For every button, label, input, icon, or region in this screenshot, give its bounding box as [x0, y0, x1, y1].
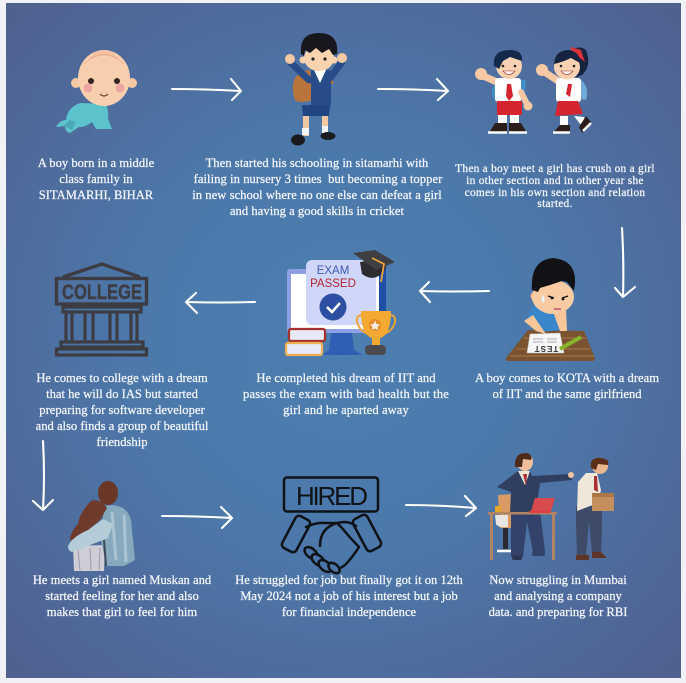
text: schooling: and having a good skills in cricket — [230, 204, 405, 218]
text: college — [36, 371, 209, 449]
icon: college building — [56, 264, 146, 355]
icon: boy studying at Kota: TEST — [534, 344, 558, 353]
icon: hired handshake: HIRED — [296, 481, 368, 511]
text: hired: May 2024 not a job of his interest but a job — [240, 589, 458, 603]
arrow: crush to Kota — [615, 228, 635, 297]
text: schooling: Then started his schooling in sitamarhi with — [206, 156, 429, 170]
text: crush — [455, 163, 655, 210]
text: Muskan: He meets a girl named Muskan and — [33, 573, 212, 587]
arrow: school to crush — [378, 79, 448, 100]
icon: crawling baby — [56, 50, 137, 133]
arrow: baby to school — [172, 79, 241, 100]
text: college: and also finds a group of beautiful — [36, 419, 209, 433]
text: Mumbai: Now struggling in Mumbai — [489, 573, 627, 587]
icon: hired handshake — [280, 478, 383, 575]
icon: exam passed screen — [286, 250, 395, 355]
text: schooling: in new school where no one else can defeat a girl — [192, 188, 442, 202]
text: exam — [243, 371, 449, 417]
text: Muskan — [33, 573, 212, 619]
text: schooling: failing in nursery 3 times but becoming a topper — [194, 172, 443, 186]
arrow: exam to college — [186, 293, 255, 313]
text: born: class family in — [59, 172, 133, 186]
icon: boy and girl in uniform — [475, 47, 591, 133]
text: college: friendship — [96, 435, 148, 449]
text: exam: He completed his dream of IIT and — [256, 371, 436, 385]
icon: college building: COLLEGE — [62, 281, 142, 304]
text: Kota: of IIT and the same girlfriend — [492, 387, 642, 401]
text: college: preparing for software developer — [39, 403, 205, 417]
text: Mumbai: data. and preparing for RBI — [489, 605, 627, 619]
arrow: Kota to exam — [420, 282, 489, 302]
icon: embracing couple — [68, 481, 135, 571]
text: exam: passes the exam with bad health but the — [243, 387, 449, 401]
text: born: A boy born in a middle — [38, 156, 155, 170]
text: Muskan: makes that girl to feel for him — [47, 605, 197, 619]
text: born: SITAMARHI, BIHAR — [39, 188, 154, 202]
icon: exam passed screen: EXAM — [317, 265, 349, 277]
text: hired: He struggled for job but finally got it on 12th — [235, 573, 464, 587]
text: Kota — [475, 371, 659, 401]
text: crush: in other section and in other year she — [466, 175, 644, 187]
arrow: hired to Mumbai — [406, 496, 476, 516]
icon: boss firing employee at desk — [488, 453, 614, 560]
text: hired: for financial independence — [282, 605, 417, 619]
text: crush: Then a boy meet a girl has crush on a girl — [455, 163, 655, 175]
text: exam: girl and he aparted away — [283, 403, 409, 417]
text: college: He comes to college with a dream — [36, 371, 208, 385]
text: Muskan: started feeling for her and also — [45, 589, 199, 603]
icon: boy studying at Kota — [506, 258, 595, 361]
text: Kota: A boy comes to KOTA with a dream — [475, 371, 659, 385]
text: Mumbai — [489, 573, 627, 619]
text: crush: started. — [537, 198, 573, 210]
text: schooling — [192, 156, 443, 218]
text: crush: comes in his own section and relation — [465, 187, 645, 199]
arrow: Muskan to hired — [162, 507, 232, 528]
text: born — [38, 156, 155, 202]
arrow: college to Muskan — [33, 441, 53, 510]
text: college: that he will do IAS but started — [46, 387, 199, 401]
text: hired — [235, 573, 464, 619]
icon: schoolboy — [285, 33, 347, 146]
text: Mumbai: and analysing a company — [494, 589, 623, 603]
icon: exam passed screen: PASSED — [310, 278, 356, 290]
